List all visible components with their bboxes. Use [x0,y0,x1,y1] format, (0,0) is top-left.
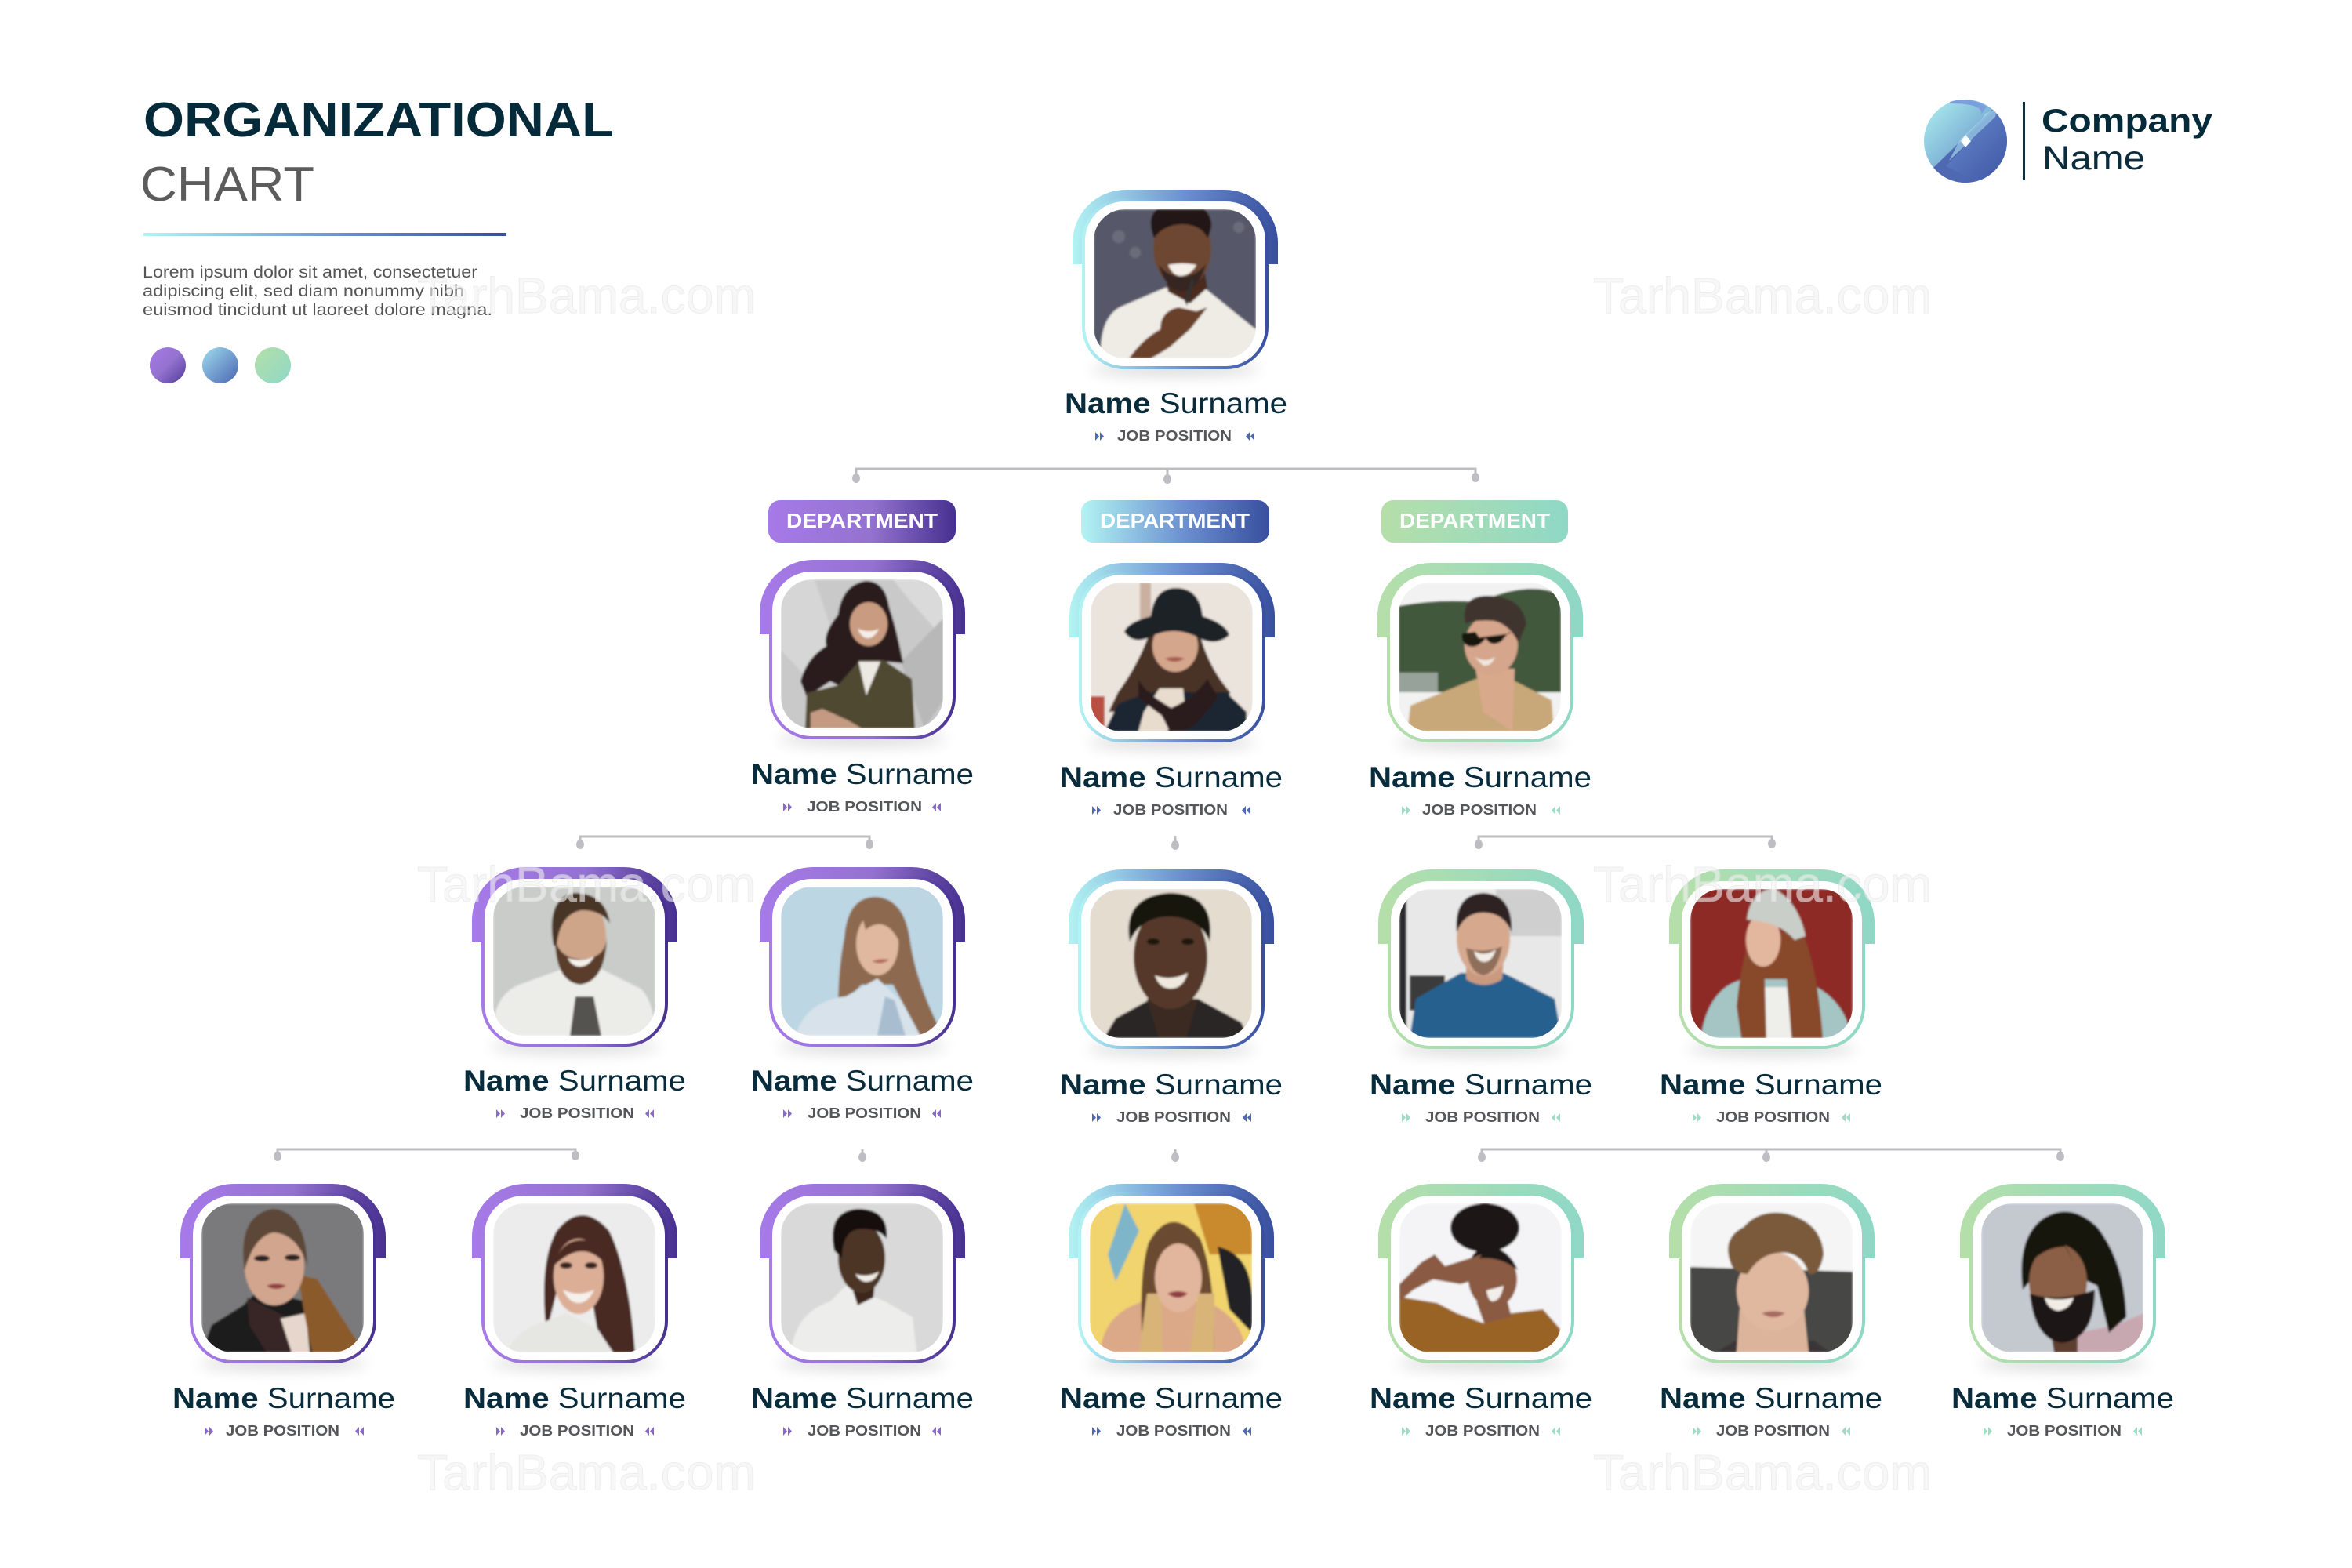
photo: man with pen [1094,209,1258,358]
card: purple level 4 second [463,1184,686,1439]
company logo: Company [2042,102,2213,139]
photo: woman in beanie [1690,889,1853,1038]
connector: level 3 purple left [274,1149,579,1161]
department badge: blue [1081,500,1269,543]
name: Name Surname [1370,1069,1592,1101]
watermarks: TarhBama.com [1593,267,1932,324]
intro text: adipiscing elit, sed diam nonummy nibh [143,282,464,300]
card: purple level 3 left [463,867,686,1121]
job position: JOB POSITION [1422,801,1537,818]
photo: woman in hat [1091,583,1253,731]
photo: long-haired woman [781,887,943,1036]
job position: JOB POSITION [1716,1422,1830,1439]
icon: chevrons left [783,1427,792,1436]
photo: bearded man [493,887,655,1036]
icon: chevrons left [1402,1113,1410,1122]
connector: level 3 purple right [858,1149,866,1162]
icon: chevrons right [645,1109,654,1118]
job position: JOB POSITION [1116,1422,1231,1439]
department badge: purple: DEPARTMENT [786,509,938,532]
name: Name Surname [1660,1382,1882,1414]
connector: level 3 blue [1171,1149,1179,1162]
photo: blonde woman [1090,1203,1252,1352]
watermarks: TarhBama.com [417,856,756,913]
icon: chevrons right [1243,1427,1251,1436]
name: Name Surname [751,1065,974,1097]
watermarks: TarhBama.com [1593,1444,1932,1501]
photo: man in white shirt [781,1203,943,1352]
photo: woman olive shirt [781,579,943,728]
icon: chevrons left [1984,1427,1992,1436]
icon: chevrons right [1552,1113,1560,1122]
card: purple level 4 third [751,1184,974,1439]
card: CEO [1065,190,1287,444]
icon: chevrons right [1842,1113,1850,1122]
name: Name Surname [1370,1382,1592,1414]
icon: chevrons left [1693,1113,1701,1122]
photo: woman with peace sign [1399,1203,1562,1352]
intro text: Lorem ipsum dolor sit amet, consectetuer [143,263,477,281]
icon: chevrons left [205,1427,213,1436]
icon: chevrons left [783,803,792,811]
name: Name Surname [1060,1382,1283,1414]
photo: man in sunglasses [1399,583,1561,731]
card: green level 3 right [1660,869,1882,1125]
card: green level 4 first [1370,1184,1592,1439]
icon: chevrons right [1246,432,1254,441]
photo: smiling man [1090,889,1252,1038]
icon: chevrons left [496,1427,505,1436]
name: Name Surname [751,1382,974,1414]
watermarks: TarhBama.com [417,1444,756,1501]
name: Name Surname [1369,761,1592,793]
job position: JOB POSITION [807,798,922,815]
icon: chevrons left [1402,1427,1410,1436]
icon: chevrons right [355,1427,364,1436]
intro text [143,263,492,319]
watermarks: TarhBama.com [417,267,756,324]
name: Name Surname [463,1382,686,1414]
icon: chevrons left [783,1109,792,1118]
card: green level 3 left [1370,869,1592,1125]
connector: level 2 purple [576,837,873,849]
icon: chevrons left [496,1109,505,1118]
title: chart: CHART [140,158,314,212]
icon: chevrons left [1092,806,1101,815]
connector: level 3 green [1478,1149,2064,1162]
icon: logo globe [1924,100,2007,183]
icon: chevrons right [932,1109,941,1118]
icon: chevrons left [1092,1113,1101,1122]
card: department purple [751,560,974,815]
job position: JOB POSITION [520,1105,634,1121]
title rule [143,233,506,236]
icon: chevrons right [932,803,941,811]
icon: chevrons left [1095,432,1104,441]
name: Name Surname [1660,1069,1882,1101]
photo: woman with scarf [201,1203,364,1352]
job position: JOB POSITION [1425,1109,1540,1125]
connector: level 2 blue [1171,836,1179,850]
photo: smiling woman [493,1203,655,1352]
card: green level 4 second [1660,1184,1882,1439]
photo: man in blue sweater [1399,889,1562,1038]
job position: JOB POSITION [1116,1109,1231,1125]
card: department blue [1060,563,1283,818]
card: department green [1369,563,1592,818]
card: blue level 3 [1060,869,1283,1125]
icon: chevrons left [1693,1427,1701,1436]
icon: chevrons right [1842,1427,1850,1436]
department badge: blue: DEPARTMENT [1100,509,1250,532]
card: purple level 4 first [172,1184,395,1439]
name: Name Surname [463,1065,686,1097]
icon: chevrons right [1242,806,1250,815]
name: Name Surname [1065,387,1287,419]
connector: level 2 green [1475,837,1776,849]
card: green level 4 third [1951,1184,2174,1439]
watermarks [417,267,1932,1501]
job position: JOB POSITION [1117,427,1232,444]
job position: JOB POSITION [1425,1422,1540,1439]
department badge: green: DEPARTMENT [1399,509,1550,532]
legend dots [150,347,291,383]
company logo [1924,100,2213,188]
name: Name Surname [1060,1069,1283,1101]
icon: chevrons right [1552,1427,1560,1436]
watermarks: TarhBama.com [1593,856,1932,913]
connector: level 1 [852,469,1479,484]
icon: chevrons right [1552,806,1560,815]
icon: chevrons right [2133,1427,2142,1436]
name: Name Surname [1951,1382,2174,1414]
job position: JOB POSITION [1113,801,1228,818]
card: purple level 3 right [751,867,974,1121]
name: Name Surname [172,1382,395,1414]
photo: curly-haired teen [1690,1203,1853,1352]
department badge: green [1381,500,1568,543]
icon: chevrons right [645,1427,654,1436]
title: organizational: ORGANIZATIONAL [143,93,614,147]
icon: chevrons right [932,1427,941,1436]
card: blue level 4 [1060,1184,1283,1439]
icon: chevrons right [1243,1113,1251,1122]
job position: JOB POSITION [2007,1422,2122,1439]
job position: JOB POSITION [226,1422,339,1439]
job position: JOB POSITION [1716,1109,1830,1125]
name: Name Surname [751,758,974,790]
job position: JOB POSITION [808,1105,921,1121]
icon: chevrons left [1092,1427,1101,1436]
photo: man with dreadlocks [1981,1203,2143,1352]
company logo: Name [2042,140,2145,177]
job position: JOB POSITION [808,1422,921,1439]
job position: JOB POSITION [520,1422,634,1439]
intro text: euismod tincidunt ut laoreet dolore magna. [143,301,492,319]
icon: chevrons left [1402,806,1410,815]
department badge: purple [768,500,956,543]
name: Name Surname [1060,761,1283,793]
